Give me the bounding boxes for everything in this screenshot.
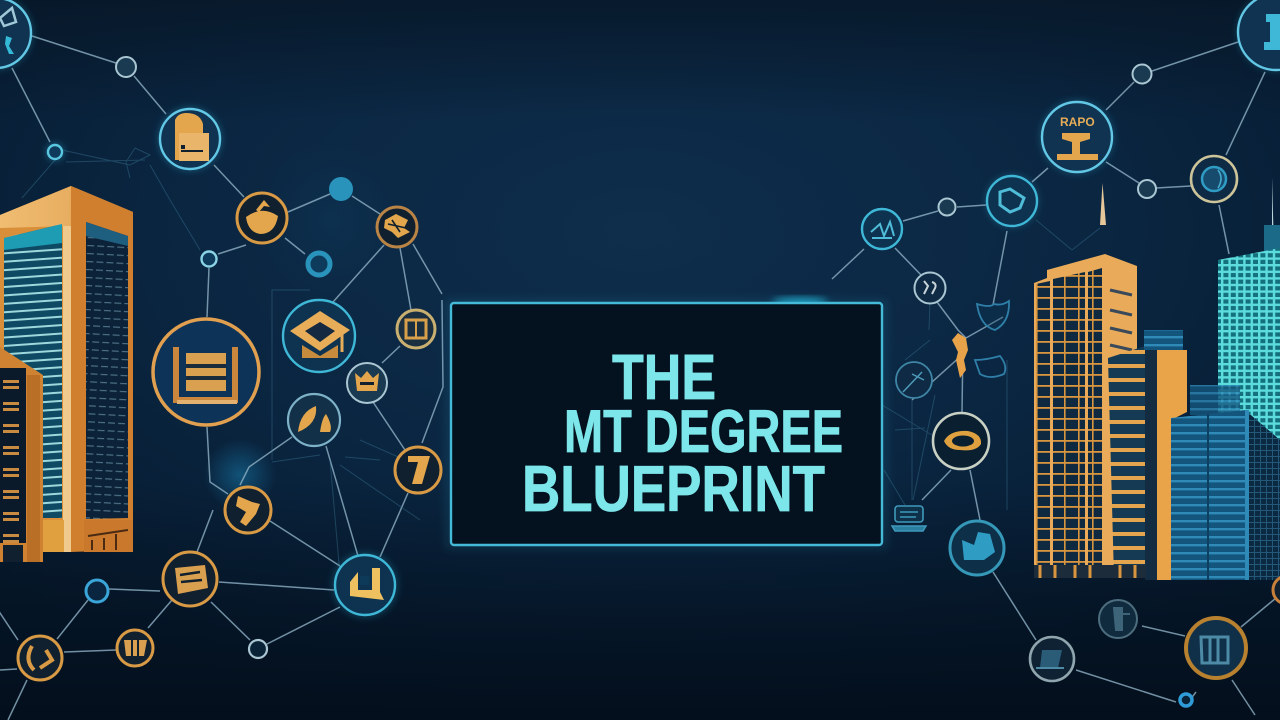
tower windows: [4, 224, 62, 552]
left building: tall orange tower: [0, 186, 133, 552]
title text: BLUEPRINT: [522, 452, 825, 525]
node: pale ring: [938, 198, 956, 216]
right building: gold tower: [1034, 183, 1187, 580]
right nodes: [862, 0, 1280, 706]
node: gold ring: [933, 413, 989, 469]
node: gold small label: [117, 630, 153, 666]
node: small cyan dot: [47, 144, 63, 160]
node: globe: [1191, 156, 1237, 202]
node: blue ring: [86, 580, 108, 602]
spire: [1100, 183, 1106, 225]
node: gold bowl: [237, 193, 287, 243]
node: gold map outline: [333, 553, 397, 617]
node: pale ring: [1138, 180, 1156, 198]
node: crown: [347, 363, 387, 403]
left building: small lower block: [0, 347, 43, 562]
node: gold seven: [395, 447, 441, 493]
icon: faint monitor: [892, 506, 926, 531]
title panel: [444, 298, 889, 550]
node: leaf: [288, 394, 340, 446]
node: gold crescent: [18, 636, 62, 680]
node: pale ring: [1132, 64, 1152, 84]
node: top-left corner: [0, 0, 32, 69]
node: blue dot: [1180, 694, 1192, 706]
left network connector lines: [0, 36, 443, 720]
title text: MT DEGREE: [564, 398, 843, 465]
node: cyan machine: [950, 521, 1004, 575]
antenna: [1272, 177, 1274, 250]
node: stacked books: [153, 319, 259, 425]
node: document icon: [159, 108, 221, 170]
node: faint figure: [1099, 600, 1137, 638]
title text: THE: [612, 341, 716, 413]
node: thick teal ring: [308, 253, 330, 275]
node: gold arch: [397, 310, 435, 348]
node: pale ring: [249, 640, 267, 658]
node: gold crest: [377, 207, 417, 247]
node: gold map: [163, 552, 217, 606]
title text: [522, 341, 843, 525]
node: cyan blob: [986, 175, 1038, 227]
node: gold podium: [1041, 101, 1113, 173]
right building: cyan tower: [1218, 177, 1280, 440]
right building: blue tower: [1171, 385, 1280, 580]
node: small ring: [116, 57, 136, 77]
node: orange edge ring: [1273, 576, 1280, 604]
icon: orange junction: [952, 333, 968, 378]
tower front: [0, 186, 71, 552]
node: gold podium: RAPO: [1060, 115, 1095, 129]
node: orange ring: [1186, 618, 1246, 678]
node: graduation cap: [283, 300, 355, 372]
node: top-right corner: [1238, 0, 1280, 70]
node: filled teal dot: [329, 177, 353, 201]
node: cyan ring: [202, 252, 216, 266]
node: gold bird: [225, 487, 271, 533]
icon: outlined leaf lower: [975, 356, 1005, 377]
icon: faint circle: [896, 362, 932, 398]
left nodes: [0, 0, 441, 680]
node: cyan network: [862, 209, 902, 249]
tower side windows: [86, 222, 128, 519]
node: grey laptop: [1030, 637, 1074, 681]
right network connector lines: [832, 42, 1276, 715]
icon: outlined leaf: [977, 301, 1009, 330]
node: pale numbered: [914, 272, 946, 304]
